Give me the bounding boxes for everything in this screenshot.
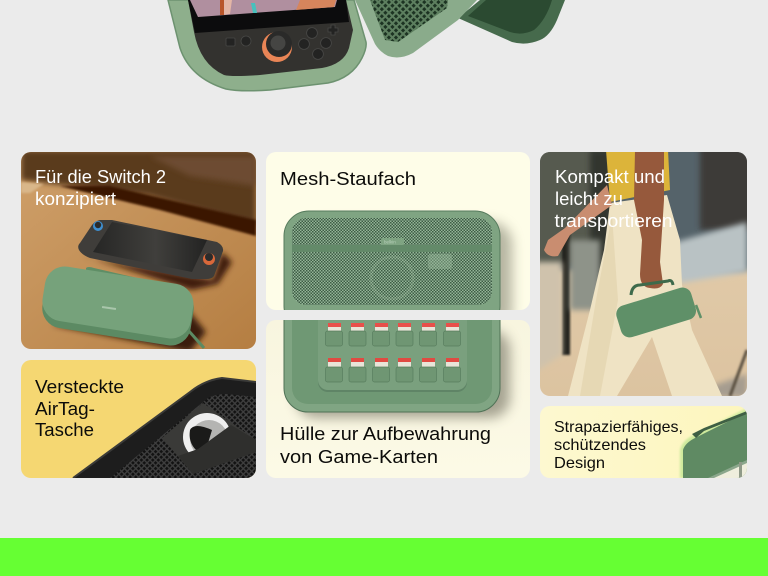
green case corner	[680, 408, 747, 478]
photo background: sofa and wood floor	[21, 150, 256, 236]
bottom green bar	[0, 538, 768, 576]
heading: Design	[554, 455, 605, 472]
game card row 1	[326, 323, 460, 346]
brand tag	[381, 238, 404, 245]
product image: open case with console	[168, 0, 565, 91]
heading: transportieren	[554, 210, 672, 231]
dark green case lid	[458, 0, 565, 44]
case body	[168, 0, 366, 91]
heading: Hülle zur Aufbewahrung	[280, 423, 491, 444]
heading: Versteckte	[35, 376, 124, 397]
carried case	[614, 280, 701, 340]
green case	[39, 264, 206, 352]
open case tray	[284, 320, 500, 412]
heading: AirTag-	[35, 398, 95, 419]
dark case corner	[73, 378, 256, 478]
heading	[554, 166, 672, 231]
heading: leicht zu	[555, 188, 623, 209]
brand tag: belkin	[384, 240, 396, 244]
heading	[554, 419, 683, 472]
walking person	[544, 150, 722, 396]
AirTag pocket	[162, 403, 256, 474]
panel: Strapazierfähiges, schützendes Design	[540, 406, 747, 478]
panel: Für die Switch 2 konzipiert	[21, 150, 256, 352]
panel: Versteckte AirTag-Tasche	[21, 360, 256, 478]
console	[188, 0, 353, 76]
panel: Kompakt und leicht zu transportieren	[540, 152, 747, 396]
case shadow	[490, 216, 519, 310]
mesh case	[284, 210, 500, 310]
heading: Strapazierfähiges,	[554, 419, 683, 436]
heading	[280, 426, 490, 463]
heading: Kompakt und	[555, 166, 665, 187]
panel: Hülle zur Aufbewahrung von Game-Karten	[266, 320, 530, 478]
analog stick	[262, 31, 292, 62]
heading: konzipiert	[35, 188, 116, 209]
mesh flap	[355, 0, 477, 57]
photo background: street	[540, 152, 747, 396]
heading: Tasche	[35, 419, 94, 440]
heading: Für die Switch 2	[35, 166, 166, 187]
console on table	[78, 220, 232, 290]
buttons	[226, 25, 338, 59]
heading	[35, 380, 124, 436]
heading: Mesh-Staufach	[280, 168, 416, 189]
heading: von Game-Karten	[280, 446, 438, 467]
heading	[35, 166, 166, 209]
game card row 2	[326, 358, 460, 382]
screen	[190, 0, 337, 17]
heading: schützendes	[554, 437, 646, 454]
panel: Mesh-Staufach	[266, 152, 530, 310]
case shadow	[296, 330, 510, 418]
